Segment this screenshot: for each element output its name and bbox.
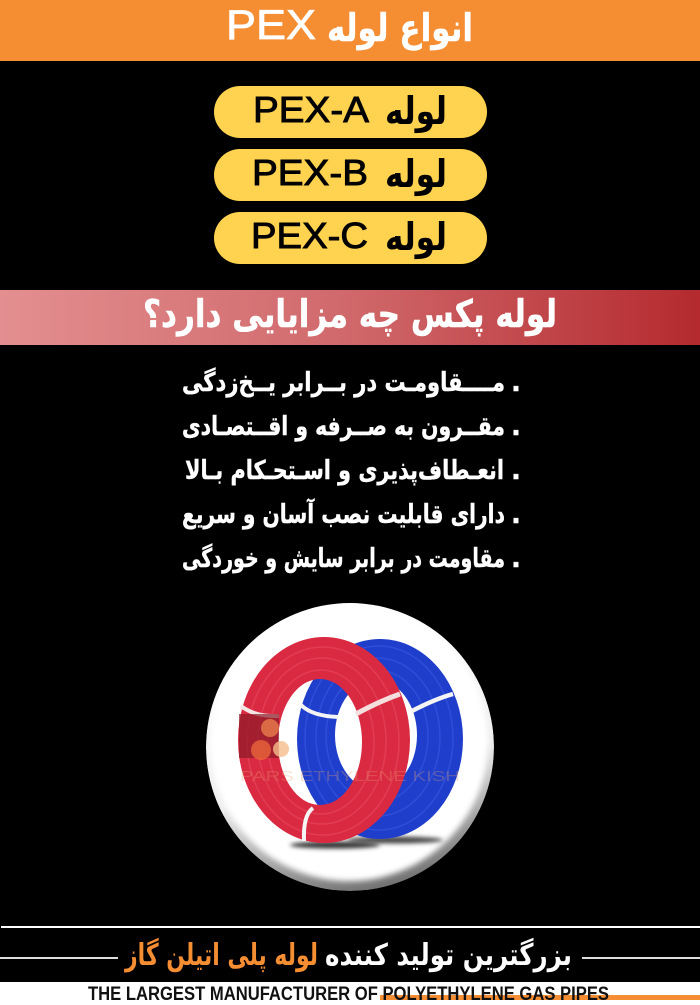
pill: PEX-B: PEX-B [252, 152, 368, 193]
item 5: مقاومت در برابر سایش و خوردگی [182, 543, 505, 574]
title: انواع لوله [327, 6, 473, 50]
item 4: دارای قابلیت نصب آسان و سریع [182, 498, 505, 530]
item 1: مــــقاومـت در بــرابر یــخ‌زدگی [182, 367, 505, 398]
watermark logo: PARS ETHYLENE KISH [240, 768, 460, 785]
pill: PEX-A: PEX-A [253, 89, 369, 130]
item 3: . [511, 456, 521, 486]
list of advantages [182, 367, 521, 574]
pill: PEX-C: لوله [385, 215, 447, 259]
title [226, 1, 473, 50]
item 1: . [511, 368, 521, 398]
banner: advantages heading [0, 290, 700, 345]
pill: PEX-B: لوله [385, 152, 447, 196]
title: PEX [226, 1, 316, 48]
header band [0, 0, 700, 61]
item 4: . [511, 500, 521, 530]
pill: PEX-A: لوله [385, 89, 447, 133]
english footer strip: THE LARGEST MANUFACTURER OF POLYETHYLENE GAS PIPES [88, 984, 609, 1005]
watermark logo [239, 714, 460, 785]
product image: PEX pipe coils in circle [206, 603, 494, 891]
pill: PEX-C: PEX-C [251, 215, 368, 256]
item 2: مقــرون به صــرفه و اقــتصـادی [182, 412, 505, 442]
item 2: . [511, 412, 521, 442]
item 5: . [511, 544, 521, 574]
footer tagline [0, 937, 700, 973]
red coil [238, 637, 410, 848]
item 3: انعـطاف‌پذیری و اسـتحـکام بـالا [185, 456, 504, 486]
pill: PEX-B [214, 149, 487, 201]
pill: PEX-A [214, 86, 487, 138]
footer rule [1, 926, 700, 928]
footer tagline: بزرگترین تولید کننده [325, 937, 572, 973]
blue coil [297, 639, 463, 844]
banner: advantages heading: لوله پکس چه مزایایی دارد؟ [143, 292, 557, 336]
white circle [206, 603, 494, 891]
footer tagline: لوله پلی اتیلن گاز [124, 937, 318, 973]
pill: PEX-C [214, 212, 487, 264]
